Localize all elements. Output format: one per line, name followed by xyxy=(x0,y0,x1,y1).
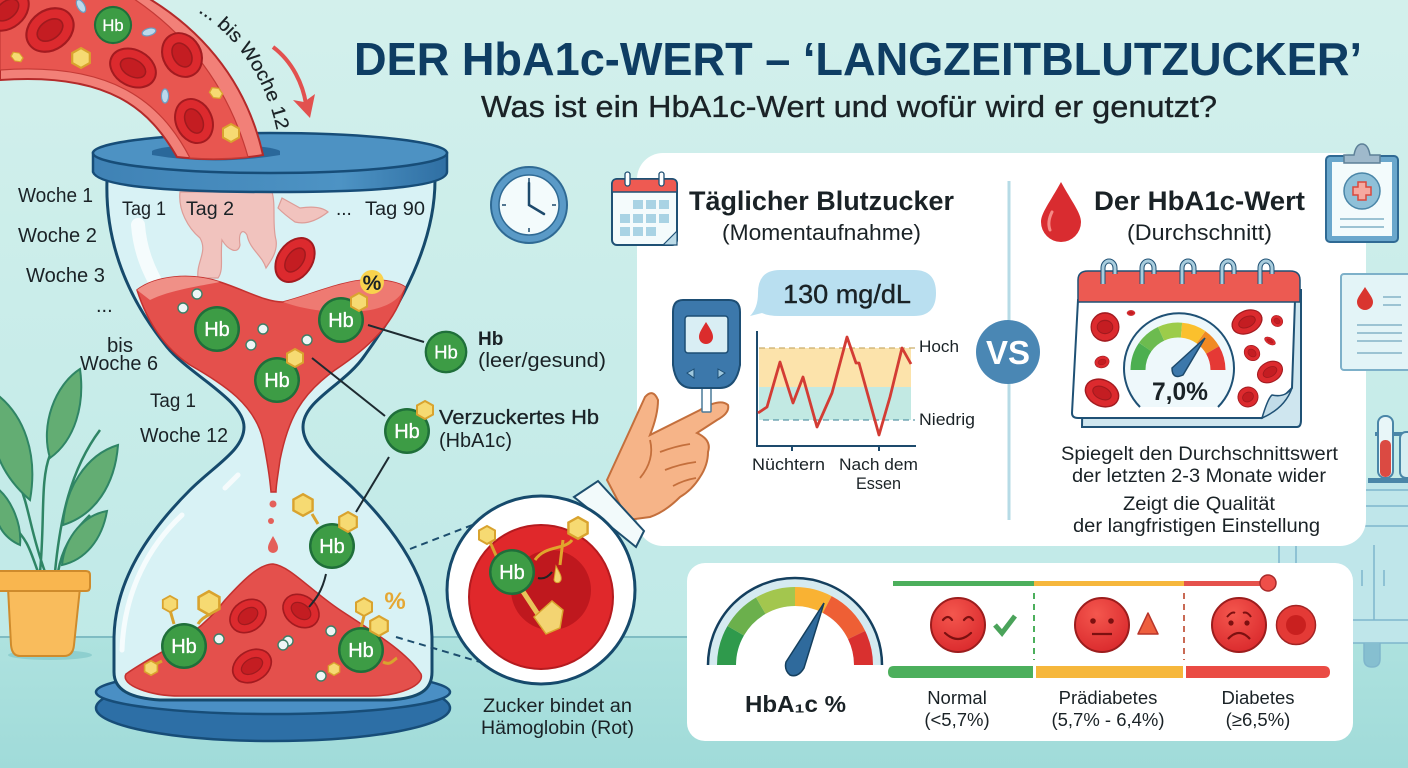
legend: glycated Hb: (HbA1c) xyxy=(439,430,512,452)
floor xyxy=(0,636,1408,768)
magnifier detail xyxy=(447,496,635,684)
plant pot xyxy=(0,571,92,660)
hourglass base xyxy=(96,670,450,741)
Hb molecule lower right xyxy=(328,598,397,675)
day labels: Tag 90 xyxy=(365,199,425,220)
Hb molecule upper left: Hb xyxy=(204,319,230,341)
large gauge xyxy=(708,578,882,717)
legend: empty Hb xyxy=(425,329,606,373)
Hb molecule lower left: Hb xyxy=(171,636,197,658)
Hb molecule lower middle: Hb xyxy=(319,536,345,558)
red arrow xyxy=(273,47,315,118)
magnifier detail: Hb xyxy=(499,562,525,584)
chart: daily glucose: Nach dem xyxy=(839,455,918,474)
range labels xyxy=(924,687,1295,730)
calendar gauge: 7,0% xyxy=(1152,378,1208,406)
VS badge xyxy=(976,320,1040,384)
pipe xyxy=(0,0,263,159)
callout lines xyxy=(309,325,424,607)
text: averages: Spiegelt den Durchschnittswert xyxy=(1061,444,1339,465)
range dividers xyxy=(1034,593,1184,660)
top range bar xyxy=(893,575,1276,591)
icon: clock xyxy=(491,167,567,243)
legend: empty Hb: Hb xyxy=(478,329,503,350)
speech bubble: 130 mg/dL xyxy=(750,270,936,316)
icon: clipboard xyxy=(1326,144,1398,242)
Hb molecule in pipe: Hb xyxy=(102,16,124,35)
range labels: (<5,7%) xyxy=(924,709,990,730)
Hb molecule lower left xyxy=(145,591,219,675)
Hb molecule upper left xyxy=(194,306,240,352)
icon: blood drop xyxy=(1041,182,1081,242)
panel: scale xyxy=(687,563,1353,741)
legend: glycated Hb: Verzuckertes Hb xyxy=(439,407,599,429)
legend: empty Hb: (leer/gesund) xyxy=(478,350,606,372)
divider xyxy=(1008,181,1010,520)
legend: empty Hb: Hb xyxy=(434,342,458,363)
day labels: Tag 2 xyxy=(186,199,234,220)
chart: daily glucose xyxy=(752,331,975,493)
Hb molecule upper centre xyxy=(254,349,303,403)
big calendar xyxy=(1072,261,1301,427)
blood drops xyxy=(268,500,278,553)
subtitle: Was ist ein HbA1c-Wert und wofür wird er genutzt? xyxy=(481,89,1217,124)
range labels: (≥6,5%) xyxy=(1226,709,1290,730)
falling blood splash xyxy=(180,192,328,278)
lower blood mound xyxy=(125,564,421,696)
icon: small calendar xyxy=(612,172,677,245)
Hb molecule lower middle xyxy=(293,494,357,569)
text: averages: der letzten 2-3 Monate wider xyxy=(1072,466,1327,487)
week labels: ... xyxy=(96,295,113,317)
caption: sugar binds: Zucker bindet an xyxy=(483,696,632,717)
chart: daily glucose: Hoch xyxy=(919,337,959,356)
week labels: Woche 12 xyxy=(140,425,228,447)
week labels: Tag 1 xyxy=(150,391,196,412)
day labels: Tag 1 xyxy=(122,199,166,220)
range labels: Normal xyxy=(927,687,987,708)
icon: document xyxy=(1341,274,1408,370)
day labels xyxy=(122,199,425,220)
face: diabetes xyxy=(1212,598,1316,652)
blood cells in pipe xyxy=(0,0,239,149)
large gauge: HbA₁c % xyxy=(745,691,846,717)
face: prediabetes xyxy=(1075,598,1158,652)
icon: glucose meter xyxy=(673,300,740,412)
Hb molecule in pipe xyxy=(94,6,132,44)
sleeve cuff xyxy=(574,481,644,547)
week labels: Woche 3 xyxy=(26,265,105,287)
hand with finger xyxy=(607,393,728,520)
oxygen bubbles xyxy=(178,289,336,681)
Hb molecule upper right xyxy=(318,293,367,343)
legend: glycated Hb xyxy=(384,401,599,454)
glass highlights xyxy=(122,225,238,650)
icon: test tubes xyxy=(1368,416,1408,483)
calendar blood cells xyxy=(1081,305,1286,412)
range labels: Diabetes xyxy=(1221,687,1295,708)
week labels xyxy=(18,185,228,447)
chart: daily glucose: Niedrig xyxy=(919,410,975,429)
heading: HbA1c: (Durchschnitt) xyxy=(1127,220,1272,245)
lower range bar xyxy=(888,666,1330,678)
hourglass glass xyxy=(107,180,435,700)
caption: sugar binds: Hämoglobin (Rot) xyxy=(481,718,634,739)
VS badge: VS xyxy=(986,334,1030,371)
day labels: ... xyxy=(336,199,352,220)
Hb molecule upper right: Hb xyxy=(328,310,354,332)
legend: glycated Hb: Hb xyxy=(394,421,420,443)
percent badge upper: % xyxy=(363,272,382,295)
upper blood pool xyxy=(137,276,405,492)
heading: HbA1c xyxy=(1094,186,1305,245)
title: DER HbA1c-WERT – ‘LANGZEITBLUTZUCKER’ xyxy=(354,33,1362,85)
dashed connectors to magnifier xyxy=(396,522,480,662)
range labels: Prädiabetes xyxy=(1059,687,1157,708)
speech bubble: 130 mg/dL: 130 mg/dL xyxy=(783,279,911,309)
hourglass lid xyxy=(93,133,447,192)
face: normal xyxy=(931,598,1015,652)
lower blood cells xyxy=(223,587,326,689)
plant xyxy=(0,369,118,572)
range labels: (5,7% - 6,4%) xyxy=(1051,709,1165,730)
chart: daily glucose: Nüchtern xyxy=(752,455,825,474)
heading: daily glucose: Täglicher Blutzucker xyxy=(689,186,954,216)
text: averages xyxy=(1061,444,1339,537)
heading: daily glucose xyxy=(689,186,954,245)
calendar gauge xyxy=(1124,313,1234,407)
text: averages: der langfristigen Einstellung xyxy=(1073,516,1320,537)
caption: sugar binds xyxy=(481,696,634,739)
pipe label: bis Woche 12: ... bis Woche 12 xyxy=(200,11,289,130)
falling red blood cell xyxy=(267,231,323,289)
chart: daily glucose: Essen xyxy=(856,474,901,493)
week labels: bis xyxy=(107,335,133,357)
heading: HbA1c: Der HbA1c-Wert xyxy=(1094,186,1305,216)
panel: comparison xyxy=(637,153,1366,546)
text: averages: Zeigt die Qualität xyxy=(1123,494,1276,515)
week labels: Woche 6 xyxy=(80,353,158,375)
Hb molecule lower right: Hb xyxy=(348,640,374,662)
week labels: Woche 1 xyxy=(18,185,93,207)
Hb molecule upper centre: Hb xyxy=(264,370,290,392)
heading: daily glucose: (Momentaufnahme) xyxy=(722,220,921,245)
percent sign lower: % xyxy=(384,588,406,615)
lab cabinet background xyxy=(1278,480,1408,667)
week labels: Woche 2 xyxy=(18,225,97,247)
